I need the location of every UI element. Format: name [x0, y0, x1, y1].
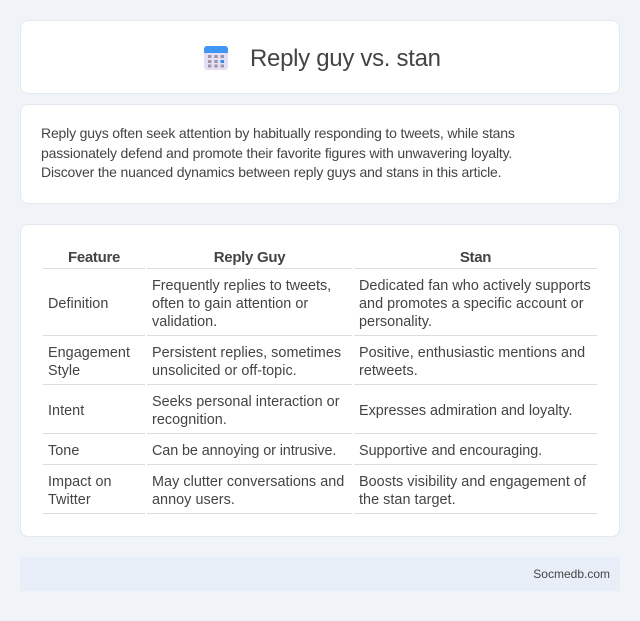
row: tone: Tone: [48, 443, 79, 459]
row: engagement style: Positive, enthusiastic mentions and: [359, 345, 585, 361]
row: definition: and promotes a specific account or: [359, 296, 584, 312]
row: definition: Frequently replies to tweets,: [152, 278, 331, 294]
panel: intro text card: [20, 104, 620, 204]
row: impact on twitter: annoy users.: [152, 492, 235, 508]
table header: Reply Guy: [214, 249, 285, 266]
title: Reply guy vs. stan: [250, 45, 441, 72]
row: engagement style: [48, 345, 585, 379]
row: definition: Definition: [48, 296, 108, 312]
panel: title card: [20, 20, 620, 94]
row: impact on twitter: Impact on: [48, 474, 112, 490]
row: engagement style: Persistent replies, sometimes: [152, 345, 341, 361]
row: intent: Expresses admiration and loyalty.: [359, 403, 572, 419]
row: engagement style: Engagement: [48, 345, 130, 361]
row: engagement style: Style: [48, 363, 80, 379]
table header: Feature: [68, 249, 120, 266]
footer source text: Socmedb.com: [533, 567, 610, 581]
row: intent: recognition.: [152, 412, 227, 428]
row: intent: Seeks personal interaction or: [152, 394, 340, 410]
row: impact on twitter: May clutter conversations and: [152, 474, 344, 490]
row: intent: [48, 394, 572, 428]
row: definition: often to gain attention or: [152, 296, 308, 312]
row: impact on twitter: Boosts visibility and engagement of: [359, 474, 586, 490]
row: tone: Can be annoying or intrusive.: [152, 443, 336, 459]
icon: calendar: [204, 46, 228, 70]
table header: [68, 249, 491, 266]
footer bar: [20, 557, 620, 591]
intro text: [41, 125, 515, 180]
row: definition: validation.: [152, 314, 217, 330]
row: impact on twitter: Twitter: [48, 492, 91, 508]
row: definition: Dedicated fan who actively supports: [359, 278, 591, 294]
row: definition: personality.: [359, 314, 432, 330]
row: engagement style: unsolicited or off-topic.: [152, 363, 297, 379]
panel: comparison table card: [20, 224, 620, 537]
intro text: Reply guys often seek attention by habitually responding to tweets, while stans: [41, 125, 515, 141]
row: intent: Intent: [48, 403, 84, 419]
row: impact on twitter: the stan target.: [359, 492, 456, 508]
intro text: Discover the nuanced dynamics between reply guys and stans in this article.: [41, 164, 501, 180]
row: definition: [48, 278, 591, 330]
row: engagement style: retweets.: [359, 363, 418, 379]
table header: Stan: [460, 249, 491, 266]
row: impact on twitter: [48, 474, 586, 508]
intro text: passionately defend and promote their favorite figures with unwavering loyalty.: [41, 144, 512, 160]
row: tone: [48, 443, 542, 459]
comparison table: [43, 249, 597, 514]
row: tone: Supportive and encouraging.: [359, 443, 542, 459]
